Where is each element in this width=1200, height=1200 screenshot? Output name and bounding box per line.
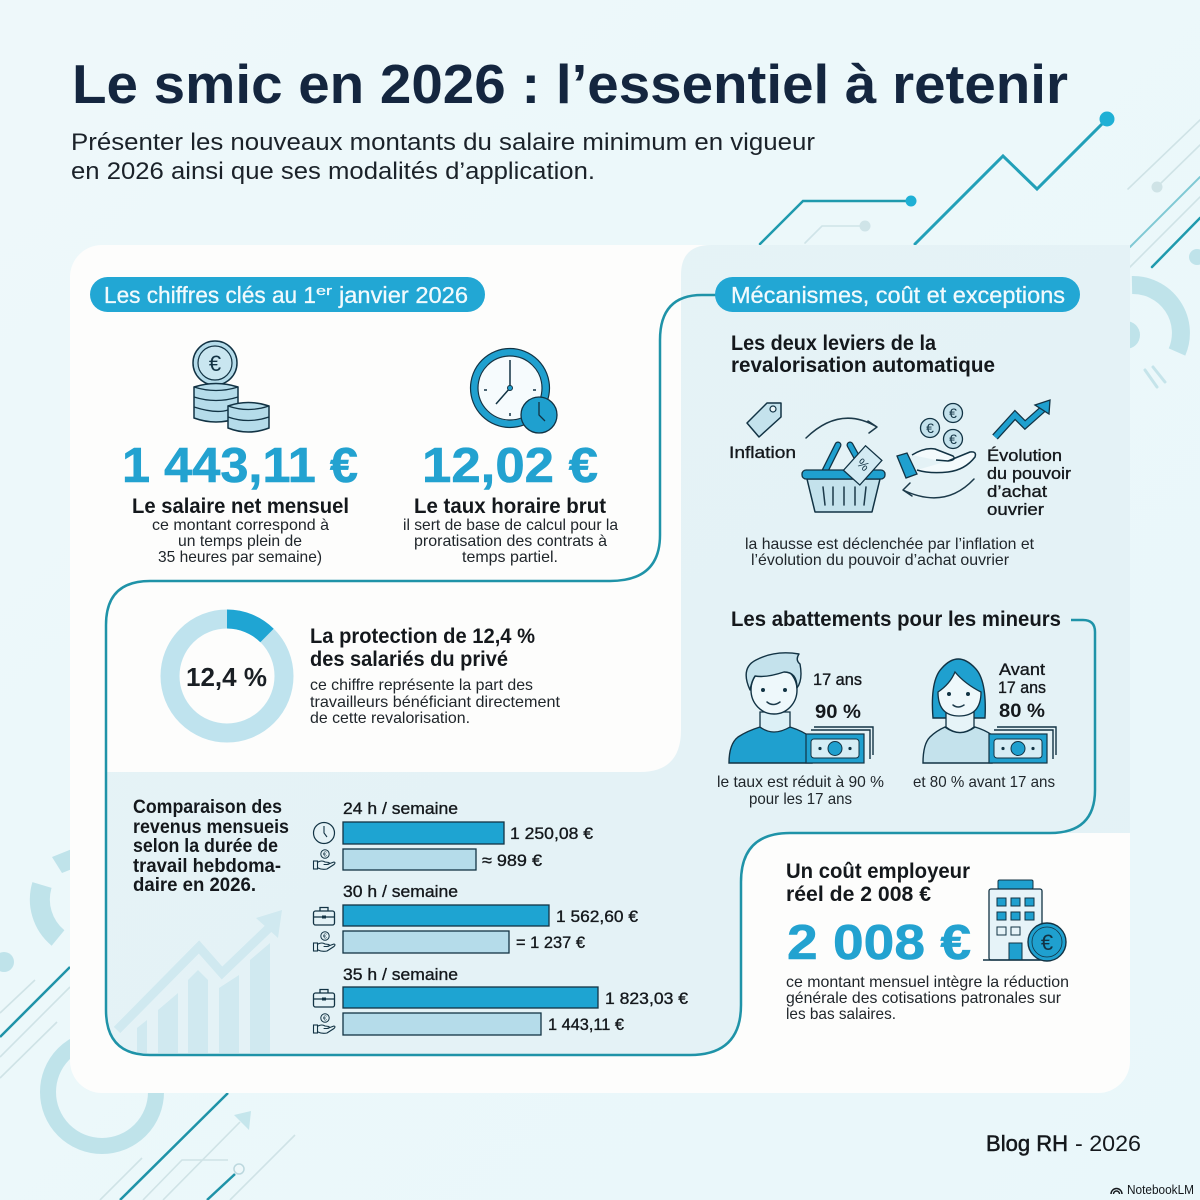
text block: protection: de cette revalorisation. [310,710,470,727]
subtitle: en 2026 ainsi que ses modalités d’application. [71,158,595,185]
heading: employer cost: réel de 2 008 € [786,883,931,906]
caption: 17 years: pour les 17 ans [749,791,852,808]
main card [70,245,1130,1093]
label: purchasing power: ouvrier [987,500,1044,519]
figure: gross hourly rate: temps partiel. [462,549,558,566]
bar chart: 30 h: = 1 237 € [516,933,586,952]
bar chart: 24 h [314,799,594,870]
heading pill: key figures: janvier 2026 [338,282,468,308]
icon: hand with euro coins [897,404,975,478]
icon: hand with euro coins: € [949,405,957,421]
decoration: top-right growth lines [760,112,1200,387]
label: 17 years 90 %: 17 ans [813,670,862,689]
label: purchasing power: du pouvoir [987,464,1071,483]
caption: under 17 years: et 80 % avant 17 ans [913,774,1055,791]
bar chart: 30 h: 1 562,60 € [556,907,639,926]
panel: employer cost [786,860,1069,1023]
arrow: inflation to basket [806,418,877,438]
figure: net monthly wage: un temps plein de [178,533,302,550]
text block: protection: La protection de 12,4 % [310,625,535,648]
icon: rising trend arrow [995,400,1050,437]
bar chart: 35 h [314,965,689,1035]
heading: two levers: Les deux leviers de la [731,332,936,355]
figure: gross hourly rate [403,439,618,566]
icon: boy with banknotes [729,653,873,763]
label: under 17 years 80 %: 80 % [999,701,1045,722]
bar chart: 30 h: 30 h / semaine [343,882,458,901]
heading pill: mechanisms [715,277,1080,312]
figure: gross hourly rate: 12,02 € [422,439,598,493]
icon: briefcase [314,908,334,925]
figure: gross hourly rate: Le taux horaire brut [414,495,606,518]
footer: source [986,1131,1141,1156]
figure: 2 008 €: 2 008 € [787,916,971,970]
icon: briefcase [314,990,334,1007]
heading: two levers [731,332,995,377]
label: purchasing power [987,446,1071,519]
title: Le smic en 2026 : l’essentiel à retenir [72,53,1068,115]
footer: NotebookLM mark: NotebookLM [1127,1183,1194,1197]
label: purchasing power: Évolution [987,446,1062,465]
text block: employer cost detail: générale des cotisations patronales sur [786,990,1062,1007]
blue zone behind the mechanisms and comparison panels [106,245,1130,1055]
heading: employer cost [786,860,970,906]
donut chart: 12,4 %: 12,4 % [186,662,267,692]
label: 17 years 90 % [813,670,862,723]
panel: mechanisms [715,277,1080,808]
figure: net monthly wage: ce montant correspond à [152,517,329,534]
icon: shopping basket: % [854,455,873,474]
arrow: back to basket [903,479,974,498]
heading pill: key figures: Les chiffres clés au 1 [104,282,316,308]
faint growth chart inside comparison panel [117,910,282,1053]
text block: comparison heading: Comparaison des [133,797,282,818]
caption: 17 years: le taux est réduit à 90 % [717,774,884,791]
text block: comparison heading: travail hebdoma- [133,856,281,877]
text block: comparison heading: daire en 2026. [133,875,256,896]
icon: hand with coin [314,850,335,869]
panel: protection share [170,619,561,733]
icon: hand with euro coins: € [926,420,934,436]
subtitle [71,129,815,185]
footer: source: - 2026 [1075,1131,1141,1156]
heading: two levers: revalorisation automatique [731,354,995,377]
text block: employer cost detail: ce montant mensuel intègre la réduction [786,974,1069,991]
text block: comparison heading: selon la durée de [133,836,278,857]
figure: net monthly wage: 1 443,11 € [122,439,358,493]
heading: minors: Les abattements pour les mineurs [731,608,1061,631]
icon: hand with coin [314,1014,335,1033]
panel: key figures [90,277,618,566]
icon: shopping basket [802,445,885,512]
icon: clock [470,348,557,433]
icon: stack of euro coins: € [209,351,221,376]
icon: building with euro coin: € [1041,930,1053,955]
heading pill: key figures [90,277,485,312]
subtitle: Présenter les nouveaux montants du salaire minimum en vigueur [71,129,815,156]
footer: source: Blog RH [986,1131,1068,1156]
icon: building with euro coin [983,880,1066,961]
text block: protection: des salariés du privé [310,648,508,671]
text block: comparison heading: revenus mensueis [133,817,289,838]
heading pill: key figures: er [316,283,333,298]
label: inflation: Inflation [729,443,796,462]
bar chart: 24 h: 1 250,08 € [510,824,594,843]
bar chart: 35 h: 1 823,03 € [605,989,689,1008]
panel: income comparison [133,797,689,1035]
icon: girl with banknotes [923,659,1056,763]
text block: trigger [745,536,1035,569]
icon: clock small [314,822,334,844]
figure: net monthly wage: Le salaire net mensuel [132,495,349,518]
label: under 17 years 80 %: 17 ans [998,678,1046,697]
text block: trigger: la hausse est déclenchée par l’inflation et [745,536,1035,553]
figure: net monthly wage [122,439,358,566]
label: under 17 years 80 % [998,660,1046,722]
label: 17 years 90 %: 90 % [815,702,861,723]
text block: protection [310,625,561,727]
text block: protection: travailleurs bénéficiant directement [310,694,561,711]
icon: hand with euro coins: € [949,431,957,447]
heading pill: mechanisms: Mécanismes, coût et exceptions [731,282,1065,308]
text block: employer cost detail [786,974,1069,1023]
bar chart: 24 h: ≈ 989 € [482,851,543,870]
text block: trigger: l’évolution du pouvoir d’achat ouvrier [751,552,1010,569]
heading: employer cost: Un coût employeur [786,860,970,883]
icon: stack of euro coins [193,341,269,432]
figure: gross hourly rate: proratisation des contrats à [414,533,607,550]
text block: comparison heading [133,797,289,896]
bar chart: 35 h: 35 h / semaine [343,965,458,984]
figure: gross hourly rate: il sert de base de calcul pour la [403,517,618,534]
icon: price tag [747,403,781,437]
label: purchasing power: d’achat [987,482,1047,501]
donut chart: 12,4 % [170,619,284,733]
icon: hand with coin [314,932,335,951]
decoration: bottom-left lines and rings [0,849,295,1200]
label: under 17 years 80 %: Avant [999,660,1045,679]
caption: 17 years [717,774,884,808]
figure: net monthly wage: 35 heures par semaine) [158,549,322,566]
connector line [106,295,1095,1055]
bar chart: 35 h: 1 443,11 € [548,1015,625,1034]
bar chart: 24 h: 24 h / semaine [343,799,458,818]
bar chart: 30 h [314,882,639,953]
text block: protection: ce chiffre représente la part des [310,677,533,694]
text block: employer cost detail: les bas salaires. [786,1006,896,1023]
